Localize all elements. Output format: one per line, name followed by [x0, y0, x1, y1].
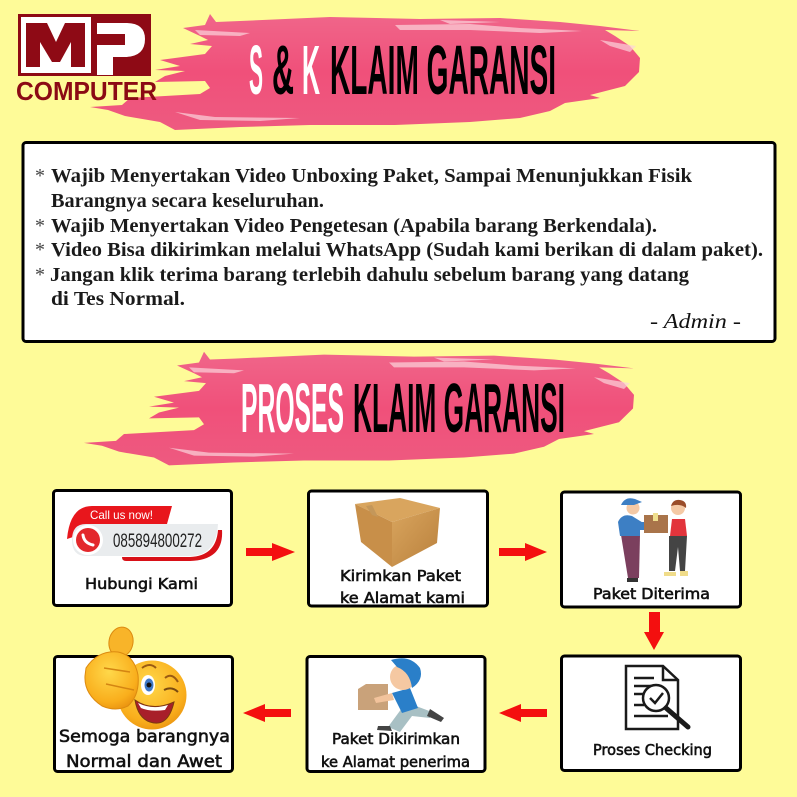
terms text: [35, 165, 763, 310]
step 3: Paket Diterima: Paket Diterima: [593, 585, 710, 603]
step 3: Paket Diterima: [562, 492, 740, 607]
step 5: Paket Dikirimkan: ke Alamat penerima: [321, 753, 470, 771]
title: S & K Klaim Garansi: K: [302, 31, 320, 109]
title: S & K Klaim Garansi: S: [249, 31, 263, 109]
step 1: Hubungi Kami: [54, 490, 232, 606]
arrow: step 5 to 6: [243, 704, 291, 722]
icon: cardboard box: [355, 498, 440, 567]
signature: - Admin -: [650, 309, 741, 333]
icon: running courier: [358, 658, 444, 732]
terms text: *: [35, 239, 45, 261]
step 4: Proses Checking: [562, 656, 740, 770]
step 2: Kirimkan Paket: Kirimkan Paket: [340, 567, 461, 585]
step 5: Paket Dikirimkan: [307, 656, 485, 772]
step 1: Hubungi Kami: Hubungi Kami: [85, 575, 198, 593]
step 2: Kirimkan Paket: [308, 491, 488, 607]
terms text: Jangan klik terima barang terlebih dahulu sebelum barang yang datang: [50, 264, 689, 286]
icon: call us banner: Call us now!: [90, 508, 153, 522]
icon: call us banner: [67, 506, 222, 561]
icon: call us banner: 085894800272: [113, 531, 202, 552]
icon: thumbs up emoji: [85, 625, 186, 730]
icon: package handover: [618, 498, 688, 582]
terms text: Video Bisa dikirimkan melalui WhatsApp (Sudah kami berikan di dalam paket).: [51, 239, 763, 261]
terms text: *: [35, 264, 45, 286]
step 6: Semoga barangnya: Normal dan Awet: [66, 752, 222, 772]
terms text: *: [35, 215, 45, 237]
step 6: Semoga barangnya: Semoga barangnya: [59, 727, 230, 747]
logo: MP Computer: [16, 14, 157, 106]
panel: terms and conditions: [23, 142, 775, 342]
logo: MP Computer: COMPUTER: [16, 76, 157, 106]
terms text: di Tes Normal.: [51, 288, 185, 310]
step 6: Semoga barangnya: [54, 625, 232, 772]
arrow: step 2 to 3: [499, 543, 547, 561]
title: S & K Klaim Garansi: &: [272, 31, 294, 109]
terms text: Barangnya secara keseluruhan.: [51, 190, 324, 212]
arrow: step 1 to 2: [246, 543, 295, 561]
terms text: Wajib Menyertakan Video Pengetesan (Apabila barang Berkendala).: [51, 215, 657, 237]
title: Proses Klaim Garansi: PROSES: [241, 369, 344, 447]
arrow: step 4 to 5: [499, 704, 547, 722]
section brush stroke: [84, 352, 634, 465]
header brush stroke: [90, 14, 640, 130]
terms text: Wajib Menyertakan Video Unboxing Paket, Sampai Menunjukkan Fisik: [51, 165, 693, 187]
arrow: step 3 to 4: [644, 612, 664, 650]
step 5: Paket Dikirimkan: Paket Dikirimkan: [332, 730, 460, 748]
step 4: Proses Checking: Proses Checking: [593, 741, 712, 759]
icon: document check: [626, 666, 688, 729]
terms text: *: [35, 165, 45, 187]
title: S & K Klaim Garansi: [249, 31, 556, 109]
step 2: Kirimkan Paket: ke Alamat kami: [340, 589, 465, 607]
